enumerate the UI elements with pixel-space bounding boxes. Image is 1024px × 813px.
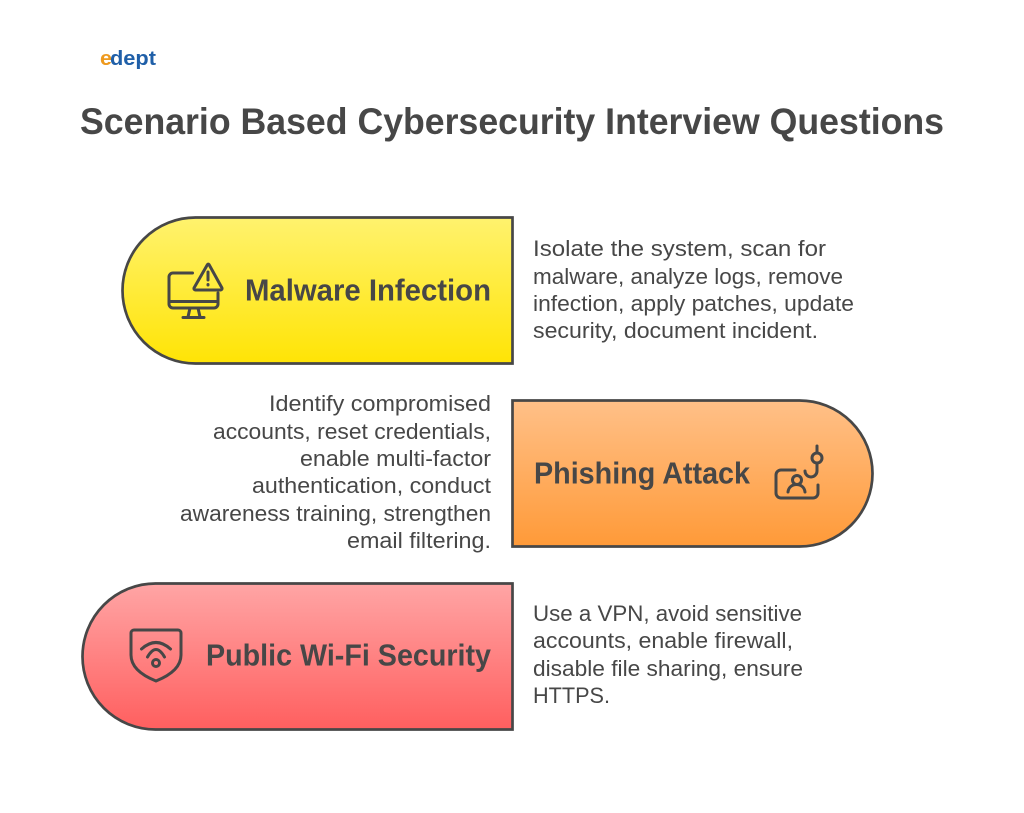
text block: wi-fi steps: Use a VPN, avoid sensitive [533,601,802,626]
icon: monitor with warning triangle [169,264,222,318]
pill: phishing attack [512,400,872,546]
text block: phishing steps: Identify compromised [269,391,491,416]
title: Scenario Based Cybersecurity Interview Questions [80,101,944,142]
text block: wi-fi steps: HTTPS. [533,683,610,708]
text block: phishing steps: authentication, conduct [252,473,491,498]
icon: wi-fi shield [131,630,181,681]
pill: malware infection [122,218,512,364]
pill: public wi-fi security [82,584,512,730]
text block: wi-fi steps [533,601,803,708]
text block: malware steps: malware, analyze logs, remove [533,264,843,289]
text block: wi-fi steps: disable file sharing, ensure [533,656,803,681]
panel: phishing attack [512,400,872,546]
heading: public wi-fi security: Public Wi-Fi Security [206,638,491,672]
text block: wi-fi steps: accounts, enable firewall, [533,628,793,653]
text block: phishing steps [180,391,491,553]
text block: phishing steps: email filtering. [347,528,491,553]
text block: phishing steps: awareness training, strengthen [180,501,491,526]
panel: public wi-fi security [82,584,512,730]
logo: edept: dept [110,48,156,70]
text block: malware steps: Isolate the system, scan for [533,236,826,261]
text block: malware steps: infection, apply patches, update [533,291,854,316]
text block: phishing steps: enable multi-factor [300,446,491,471]
panel: malware infection [122,218,512,364]
text block: malware steps [533,236,854,343]
heading: phishing attack: Phishing Attack [534,456,750,490]
icon: fish hook with user card [776,446,822,498]
logo: edept: e [100,48,112,70]
heading: malware infection: Malware Infection [245,274,491,308]
text block: malware steps: security, document incident. [533,318,818,343]
text block: phishing steps: accounts, reset credentials, [213,419,491,444]
